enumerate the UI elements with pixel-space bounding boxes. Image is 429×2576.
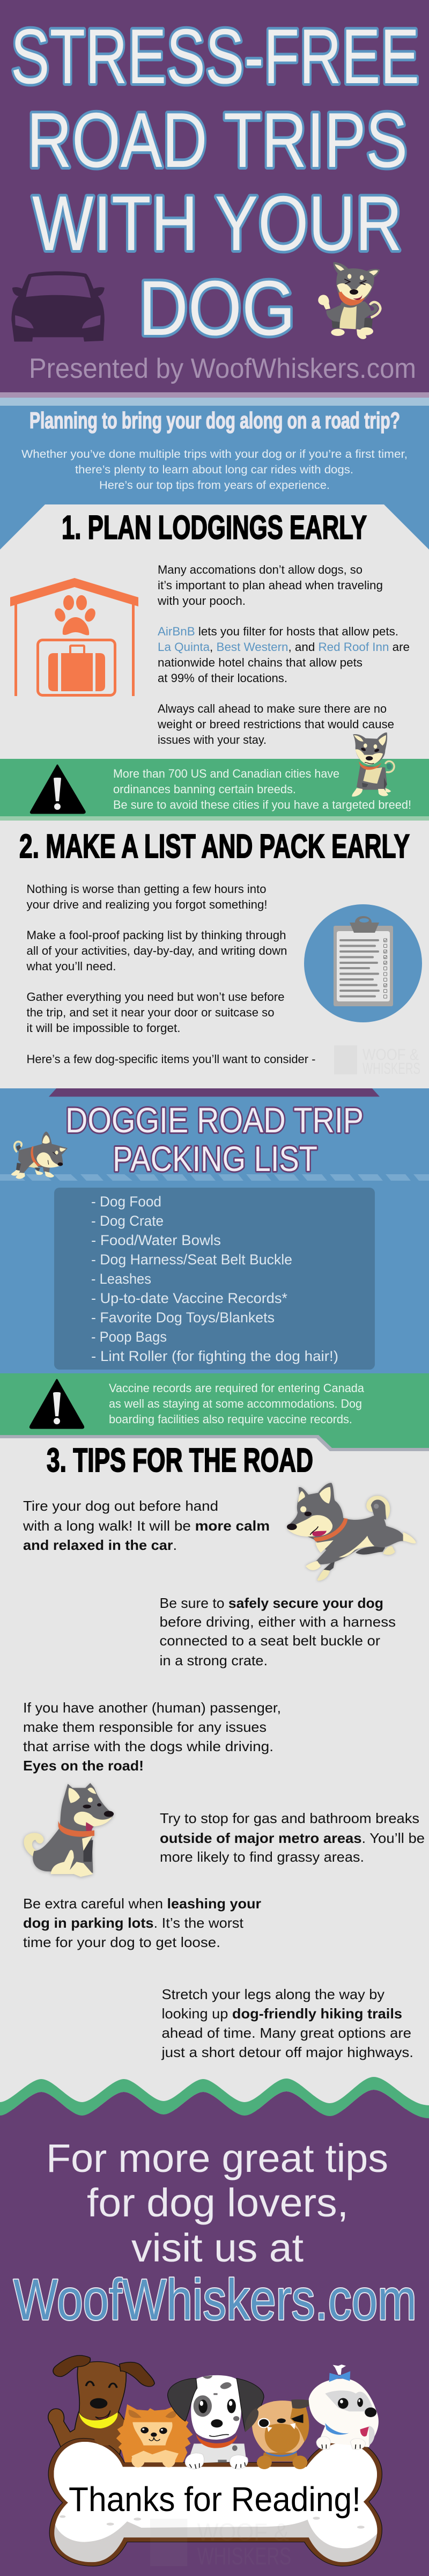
- closing message: For more great tips: [46, 2136, 388, 2180]
- list box: - Food/Water Bowls: [91, 1232, 221, 1248]
- callout text: [113, 767, 411, 811]
- lodging text: issues with your stay.: [158, 733, 267, 747]
- panel: packing list: [0, 1088, 429, 1377]
- callout text: [109, 1381, 365, 1426]
- tip: hiking: looking up dog-friendly hiking trails: [162, 2006, 402, 2022]
- list text: [26, 882, 316, 1066]
- lodging text: nationwide hotel chains that allow pets: [158, 656, 363, 669]
- list text: the trip, and set it near your door or suitcase so: [27, 1006, 275, 1019]
- intro text: Whether you’ve done multiple trips with your dog or if you’re a first timer,: [21, 448, 408, 460]
- thanks text: Thanks for Reading!: [69, 2480, 361, 2519]
- lodging text: weight or breed restrictions that would cause: [157, 718, 394, 731]
- pomeranian: [116, 2404, 193, 2468]
- callout text: Vaccine records are required for entering Canada: [109, 1381, 365, 1395]
- tip: passenger: [23, 1700, 281, 1774]
- tip: tire your dog: Tire your dog out before hand: [23, 1498, 218, 1514]
- tip: tire your dog: and relaxed in the car .: [23, 1537, 177, 1553]
- byline: Presented by WoofWhiskers.com: [29, 353, 416, 384]
- list box: - Favorite Dog Toys/Blankets: [91, 1309, 275, 1326]
- tip: tire your dog: with a long walk! It will be more calm: [23, 1518, 270, 1534]
- list text: all of your activities, day-by-day, and writing down: [27, 944, 287, 957]
- wave divider: [0, 2077, 429, 2147]
- list box: - Dog Food: [91, 1194, 161, 1210]
- icon: car: [11, 272, 105, 341]
- lodging text: AirBnB lets you filter for hosts that allow pets.: [158, 625, 398, 638]
- icon: running dog: [287, 1483, 416, 1581]
- panel: intro: [0, 406, 429, 556]
- list text: your drive and realizing you forgot something!: [27, 898, 267, 911]
- watermark: WOOF &: [363, 1046, 419, 1064]
- callout text: ordinances banning certain breeds.: [113, 782, 296, 796]
- tip: gas and bathroom breaks: Try to stop for gas and bathroom breaks: [160, 1810, 419, 1826]
- tip: leashing: time for your dog to get loose.: [23, 1934, 220, 1950]
- brown dog paws: [94, 2437, 117, 2446]
- heading 3: 3. TIPS FOR THE ROAD: [47, 1442, 313, 1479]
- tip: hiking: ahead of time. Many great options are: [162, 2025, 411, 2041]
- callout text: Be sure to avoid these cities if you have a targeted breed!: [113, 798, 411, 811]
- list box: - Dog Harness/Seat Belt Buckle: [91, 1252, 292, 1268]
- tip: passenger: make them responsible for any issues: [23, 1719, 267, 1735]
- lodging text: at 99% of their locations.: [158, 671, 287, 685]
- packing list title: PACKING LIST: [113, 1139, 317, 1179]
- list text: Gather everything you need but won’t use before: [27, 990, 284, 1004]
- bone sign: WHISKERS: [197, 2542, 291, 2570]
- bone sign: [43, 2436, 386, 2570]
- header panel: [11, 13, 419, 384]
- tip: tire your dog: [23, 1498, 270, 1553]
- lodging text: Many accomations don’t allow dogs, so: [158, 563, 363, 576]
- panel: tips for the road: [23, 1442, 425, 2060]
- lodging text: with your pooch.: [157, 594, 246, 608]
- tip: secure your dog: before driving, either with a harness: [160, 1614, 396, 1630]
- intro text: [21, 448, 408, 492]
- closing message: visit us at: [131, 2226, 304, 2270]
- packing list title: [65, 1100, 364, 1179]
- stripes under header: [0, 392, 429, 406]
- lodging text: [157, 563, 410, 747]
- icon: happy sitting dog: [318, 262, 380, 339]
- callout: breed ordinances: [0, 733, 429, 821]
- list box: - Up-to-date Vaccine Records*: [91, 1290, 287, 1306]
- callout text: as well as staying at some accommodations. Dog: [109, 1397, 362, 1410]
- tip: gas and bathroom breaks: more likely to find grassy areas.: [160, 1849, 364, 1865]
- tip: gas and bathroom breaks: outside of major metro areas . You’ll be: [160, 1830, 425, 1846]
- watermark: [334, 1045, 420, 1078]
- tip: passenger: Eyes on the road!: [23, 1758, 144, 1774]
- tip: leashing: [23, 1896, 261, 1950]
- title: [11, 13, 419, 352]
- list box: - Dog Crate: [91, 1213, 164, 1229]
- panel: road tips background: [0, 1433, 429, 2109]
- bone sign with dogs: [43, 2355, 386, 2570]
- tip: hiking: just a short detour off major highways.: [161, 2044, 413, 2060]
- lodging text: it’s important to plan ahead when traveling: [158, 579, 383, 592]
- tip: secure your dog: [160, 1595, 396, 1668]
- closing message: for dog lovers,: [87, 2180, 349, 2225]
- tip: leashing: dog in parking lots . It’s the worst: [23, 1915, 244, 1931]
- tip: hiking: Stretch your legs along the way by: [162, 1986, 384, 2002]
- callout text: boarding facilities also require vaccine records.: [109, 1413, 352, 1426]
- icon: standing dog: [352, 733, 394, 796]
- dalmatian: [168, 2375, 264, 2469]
- list box: - Lint Roller (for fighting the dog hair!): [91, 1348, 338, 1364]
- icon: pet-friendly lodging: [10, 578, 138, 696]
- list box: - Poop Bags: [91, 1329, 167, 1345]
- tip: passenger: that arrise with the dogs while driving.: [23, 1738, 273, 1754]
- bone sign: WOOF &: [197, 2518, 289, 2545]
- closing message: [13, 2136, 417, 2332]
- list text: what you’ll need.: [26, 960, 116, 973]
- white dog: [309, 2365, 379, 2450]
- intro text: Here’s our top tips from years of experience.: [99, 479, 330, 492]
- icon: warning: [31, 765, 85, 813]
- bulldog: [245, 2399, 314, 2469]
- tip: hiking: [161, 1986, 413, 2060]
- icon: seated side dog: [24, 1783, 114, 1877]
- callout text: More than 700 US and Canadian cities have: [113, 767, 339, 780]
- list box: [54, 1188, 375, 1370]
- lodging text: La Quinta, Best Western, and Red Roof Inn are: [158, 640, 410, 654]
- icon: warning: [30, 1380, 84, 1428]
- lodging text: Always call ahead to make sure there are no: [158, 702, 387, 715]
- tip: secure your dog: Be sure to safely secure your dog: [160, 1595, 383, 1611]
- icon: walking dog: [11, 1131, 68, 1179]
- intro text: there’s plenty to learn about long car rides with dogs.: [75, 464, 353, 476]
- panel: make a list: [0, 821, 429, 1088]
- tip: secure your dog: in a strong crate.: [160, 1652, 268, 1668]
- brown dog: [48, 2355, 154, 2462]
- title: DOG: [138, 265, 295, 352]
- icon: clipboard: [304, 904, 422, 1022]
- tip: passenger: If you have another (human) passenger,: [23, 1700, 281, 1716]
- list text: Here’s a few dog-specific items you’ll want to consider -: [27, 1052, 315, 1066]
- packing list title: DOGGIE ROAD TRIP: [65, 1100, 364, 1140]
- list box: - Leashes: [91, 1271, 151, 1287]
- list text: Nothing is worse than getting a few hours into: [27, 882, 266, 896]
- tip: gas and bathroom breaks: [160, 1810, 425, 1865]
- list text: Make a fool-proof packing list by thinking through: [27, 928, 286, 942]
- panel: plan lodgings: [0, 504, 429, 759]
- list text: it will be impossible to forget.: [27, 1021, 180, 1035]
- tip: leashing: Be extra careful when leashing your: [23, 1896, 261, 1912]
- tip: secure your dog: connected to a seat belt buckle or: [160, 1633, 380, 1649]
- callout: vaccine records: [0, 1373, 429, 1451]
